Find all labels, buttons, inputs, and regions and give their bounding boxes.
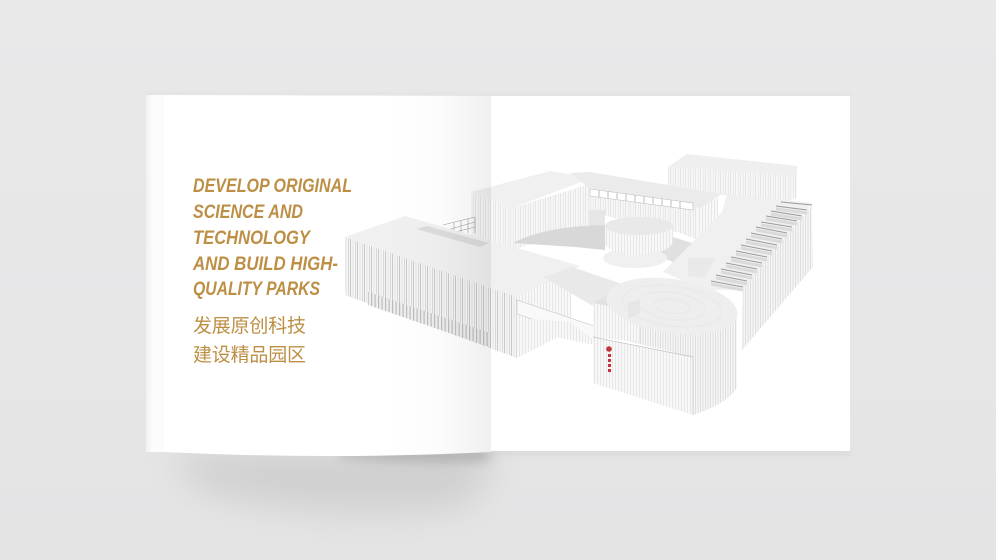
front striped wall [345,237,517,358]
back left block [471,171,592,250]
window strip [590,189,693,210]
open book [146,95,850,456]
heading: english: QUALITY PARKS [193,278,320,300]
gutter shading [462,96,491,453]
grid structure [443,217,475,233]
heading: english: TECHNOLOGY [193,227,312,249]
book shadow [146,93,850,512]
heading: chinese [193,315,306,366]
heading: english: DEVELOP ORIGINAL [193,175,352,197]
railing [368,292,490,347]
round building [593,270,741,415]
rounded wall [603,310,737,415]
red logo [606,346,612,372]
connecting block [593,303,640,342]
front panel [593,337,693,415]
stippled roof patch [688,258,716,278]
right long block [663,194,813,350]
roof [345,216,580,297]
left page [164,95,491,456]
ribs [711,209,807,290]
heading: chinese: 发展原创科技 [193,315,306,337]
heading: english: AND BUILD HIGH- [192,253,338,275]
courtyard ramp [513,225,605,250]
connector bridge [517,267,640,345]
top right block [668,154,797,204]
heading: english [192,175,352,300]
roof skylight [416,226,489,247]
right page [491,96,850,451]
heading: english: SCIENCE AND [193,201,303,223]
left main block [345,216,580,358]
heading: chinese: 建设精品园区 [193,344,306,366]
central cylinder [603,217,673,268]
centre back block [570,172,722,240]
isometric building illustration [345,154,813,415]
disc roof [603,270,741,342]
left page edge strip [146,95,165,452]
courtyard right wedge [650,237,692,262]
